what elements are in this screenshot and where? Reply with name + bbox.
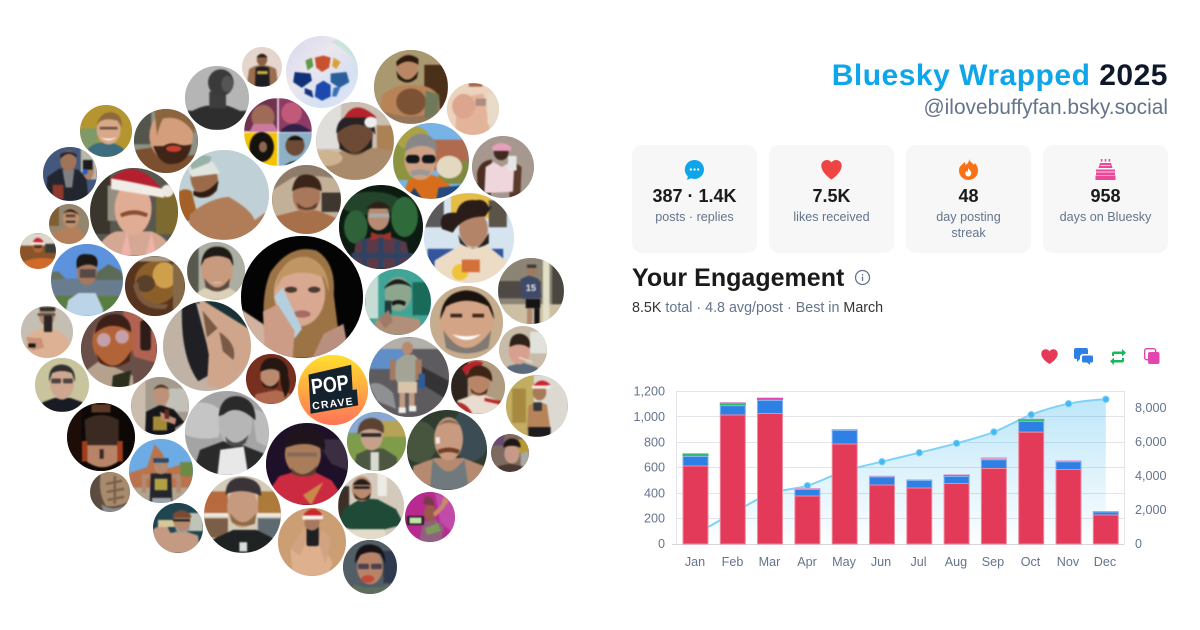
avatar: man in plaid with bow tie in ferns <box>339 185 423 269</box>
month labels: Oct <box>1021 555 1041 569</box>
avatar: man in grey tank at the gym <box>369 337 449 417</box>
engagement summary: 8.5K total · 4.8 avg/post · Best in March <box>632 300 883 316</box>
avatar: monochrome man lying on pillow <box>185 391 269 475</box>
avatar: flexing man with sunglasses and cap <box>153 503 203 553</box>
right axis labels <box>1135 401 1167 551</box>
icon: heart <box>821 160 842 180</box>
avatar: man in pink hat and white tank <box>472 136 534 198</box>
right axis labels: 8,000 <box>1135 401 1167 415</box>
right axis labels: 2,000 <box>1135 503 1167 517</box>
avatar: man with ginger beard close-up <box>134 109 198 173</box>
stat card: days on Bluesky: 958 <box>1090 186 1121 206</box>
month labels: Dec <box>1094 555 1116 569</box>
icon: quotes legend <box>1144 348 1160 364</box>
avatar: man by the river under blue sky <box>51 244 123 316</box>
avatar: small man with dark moustache <box>49 204 89 244</box>
stat card: day posting streak: 48 <box>958 186 979 206</box>
avatar: mirror selfie in band tee <box>131 377 189 435</box>
avatar: Buffy on the phone, central large circle <box>241 236 363 358</box>
icon: birthday cake <box>1096 159 1116 180</box>
avatar: man in jersey 15 at train platform <box>498 258 564 324</box>
avatar: Pop Crave logo: CRAVE <box>312 396 353 413</box>
avatar: abdomen close-up <box>90 472 130 512</box>
avatar: man with glasses sticking out tongue <box>343 540 397 594</box>
avatar: mirror selfie on tan background with Santa hat <box>278 508 346 576</box>
month labels: Jan <box>685 555 705 569</box>
avatar: man with glasses and beige wall <box>35 358 89 412</box>
avatar: blond man smiling with glasses <box>80 105 132 157</box>
icon: speech bubble <box>684 160 704 180</box>
cumulative area <box>696 399 1106 544</box>
cumulative line points <box>804 396 1109 489</box>
stat card: posts and replies <box>632 145 757 253</box>
avatar: rainbow logo on holographic background <box>286 36 358 108</box>
avatar: man with lollipop in kitchen <box>499 326 547 374</box>
icon: replies legend <box>1074 348 1093 365</box>
icon: reposts legend <box>1110 349 1126 365</box>
avatar: bearded man in cap before toy shelves <box>204 476 281 553</box>
avatar: pink collage of four portraits <box>244 98 312 166</box>
avatar: man in cowboy hat with grey beard <box>424 193 514 283</box>
stat card: likes received <box>769 145 894 253</box>
month labels: May <box>832 555 857 569</box>
month labels: Aug <box>945 555 967 569</box>
stat card: day posting streak <box>906 145 1031 253</box>
left axis labels: 1,000 <box>633 410 665 424</box>
avatar: small portrait with beanie <box>491 434 529 472</box>
stat card: posts and replies: posts · replies <box>655 210 734 224</box>
avatar: man in green jacket outdoors <box>347 412 406 471</box>
avatar: beaming man with grey beard <box>430 286 503 359</box>
avatar: Pop Crave logo <box>298 355 368 425</box>
icon: likes legend <box>1041 349 1058 364</box>
month labels: Sep <box>982 555 1004 569</box>
avatar: young man in sweater with Santa hat backdrop <box>451 360 505 414</box>
stat card: days on Bluesky <box>1043 145 1168 253</box>
avatar: man in dark green sweater <box>338 473 404 539</box>
stat card: days on Bluesky: days on Bluesky <box>1060 210 1151 224</box>
avatar: man in white cap reclining <box>179 150 269 240</box>
left axis labels: 0 <box>658 537 665 551</box>
avatar: torso selfie, pale tones <box>447 83 499 135</box>
avatar: man in Santa hat with moustache <box>90 168 178 256</box>
chart legend icons <box>1041 348 1160 365</box>
avatar: shirtless locker room selfie with Santa hat <box>506 375 568 437</box>
avatar: man with curly hair and beard <box>246 354 296 404</box>
handle: @ilovebuffyfan.bsky.social <box>923 96 1168 119</box>
avatar: bare-chested man in bed <box>272 165 341 234</box>
avatar: man with ginger moustache in grey tank <box>407 410 487 490</box>
left axis labels: 800 <box>644 436 665 450</box>
avatar: mirror selfie in black tank <box>242 47 282 87</box>
avatar: small sunburned man in Santa hat <box>20 233 56 269</box>
avatar: man in neon pink light holding a phone <box>405 492 455 542</box>
left axis labels: 200 <box>644 512 665 526</box>
avatar: man with glowing glasses in red light <box>81 311 157 387</box>
month labels <box>685 555 1116 569</box>
avatar: man in red tee with dramatic light <box>266 423 348 505</box>
icon: info <box>854 270 870 286</box>
heading: Your Engagement: Your Engagement <box>632 264 844 292</box>
avatar: Pop Crave logo: POP <box>310 370 350 399</box>
month labels: Jun <box>871 555 891 569</box>
avatar: back view in black mesh <box>67 403 135 471</box>
title: Bluesky Wrapped 2025 <box>832 59 1168 92</box>
stat card: day posting streak: streak <box>951 226 986 240</box>
avatar: man in Santa beanie <box>316 102 394 180</box>
left axis labels: 600 <box>644 460 665 474</box>
avatar: torso with open dark jacket <box>163 301 251 391</box>
cumulative line <box>696 399 1106 532</box>
stat card: likes received: 7.5K <box>812 186 851 206</box>
avatar: man before a red rock castle <box>129 439 193 503</box>
avatar: man with phone covering torso <box>21 306 73 358</box>
right axis labels: 6,000 <box>1135 435 1167 449</box>
avatar: smiling man with dark hair <box>187 242 245 300</box>
month labels: Jul <box>910 555 927 569</box>
left axis labels <box>633 384 665 551</box>
avatar: man in jersey 15 at train platform: 15 <box>526 283 536 293</box>
left axis labels: 1,200 <box>633 384 665 398</box>
left axis labels: 400 <box>644 486 665 500</box>
engagement chart <box>633 384 1167 569</box>
month labels: Nov <box>1057 555 1080 569</box>
icon: flame <box>959 159 978 180</box>
stat card: posts and replies: 387 · 1.4K <box>652 186 737 206</box>
stacked bars <box>682 398 1119 544</box>
month labels: Feb <box>722 555 743 569</box>
avatar: man with moustache on phone, teal light <box>365 269 431 335</box>
avatar: antique globe <box>125 256 185 316</box>
right axis labels: 0 <box>1135 537 1142 551</box>
stat card: likes received: likes received <box>793 210 870 224</box>
avatar: shirtless man with tattoos <box>374 50 448 124</box>
avatar: man in sunglasses with small dog <box>393 123 469 199</box>
avatar: man in hoodie with blue object <box>43 147 97 201</box>
right axis labels: 4,000 <box>1135 469 1167 483</box>
avatar collage <box>20 36 568 594</box>
stat card: day posting streak: day posting <box>936 210 1001 224</box>
avatar: monochrome man in profile <box>185 66 249 130</box>
month labels: Apr <box>797 555 817 569</box>
month labels: Mar <box>759 555 780 569</box>
